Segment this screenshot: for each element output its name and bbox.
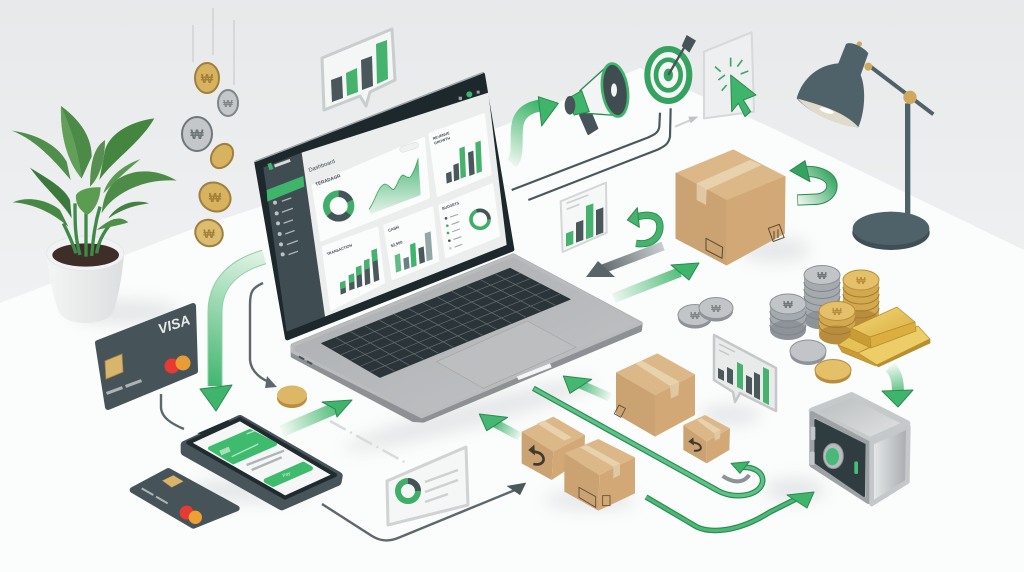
- arrow: green laptop to phone: [200, 257, 264, 411]
- trackpad: [437, 321, 576, 388]
- safe, drawn in 3x coordinates: [810, 395, 908, 504]
- box with return label: [522, 417, 585, 480]
- screen bezel: [257, 75, 512, 338]
- arrow: long green return path: [533, 388, 763, 496]
- pot: [47, 236, 124, 323]
- smartphone: Pay: [282, 470, 292, 478]
- connector: card to phone: [161, 394, 184, 429]
- lamp shade: [797, 43, 868, 127]
- return arrow: green beside chart: [627, 208, 660, 244]
- target icon: [647, 35, 696, 101]
- arrow: grey to left: [586, 246, 663, 277]
- laptop screen, drawn in 3x coordinates: [255, 73, 512, 338]
- keyboard: [322, 268, 570, 377]
- return arrow: near large box: [790, 161, 832, 200]
- visa credit card: [98, 306, 195, 407]
- gold stack short: [819, 302, 855, 344]
- card: cash bars: [385, 208, 438, 279]
- visa credit card: VISA: [156, 312, 192, 337]
- smartphone: [185, 419, 338, 506]
- large cardboard box: [676, 150, 785, 265]
- card: overview with donut and area chart: [313, 138, 429, 240]
- falling won coins: ₩: [201, 71, 214, 86]
- arrow: green to left, above boxes: [563, 376, 610, 397]
- gold bars: [838, 307, 930, 367]
- phone and lower card, drawn in 3x coordinates: [133, 419, 338, 526]
- falling won coins: ₩: [190, 126, 204, 142]
- central cardboard box: [614, 353, 695, 437]
- front box: [564, 439, 635, 511]
- gold stack tall: ₩: [856, 276, 866, 287]
- silver stack tall: ₩: [817, 271, 827, 282]
- lower dark card: [133, 471, 237, 526]
- arrow: faint grey to cursor: [675, 117, 698, 127]
- card: budgets donut: [440, 185, 499, 257]
- stems: [63, 203, 115, 257]
- desk lamp, drawn in 3x coordinates: [797, 41, 933, 250]
- card: transactions bars: [323, 228, 384, 309]
- arrow: green phone to laptop: [282, 400, 352, 431]
- laptop base, drawn in 3x coordinates: [293, 255, 641, 421]
- card: overview with donut and area chart: TERADAGR: [315, 173, 342, 187]
- cursor click card: [704, 32, 756, 118]
- silver stack short: ₩: [783, 300, 793, 311]
- megaphone: [565, 62, 631, 134]
- receipt card with donut: [387, 447, 468, 525]
- card: budgets donut: BUDGETS: [442, 201, 460, 211]
- arrow: grey head to boxes (end): [507, 483, 526, 495]
- connectors: grey lines from target to laptop: [512, 108, 671, 200]
- small chart card middle: [561, 183, 607, 252]
- top icons row, drawn in 3x coordinates: [512, 32, 756, 200]
- arrow: green to box: [614, 263, 699, 298]
- card: revenue bars: GROWTH: [434, 136, 451, 146]
- floating bar chart card, top: [322, 29, 395, 110]
- silver stack short: [770, 294, 806, 340]
- soft floor shadows: [70, 238, 825, 510]
- coin beside phone: [277, 386, 307, 408]
- heading: Dashboard: Dashboard: [308, 159, 336, 174]
- coin stacks and gold bars: [770, 266, 930, 384]
- arrow: gold to safe: [882, 367, 913, 407]
- arrow: green to safe: [646, 492, 814, 530]
- card: revenue bars: REVENUE: [432, 131, 451, 141]
- falling won coins: ₩: [223, 99, 233, 110]
- laptop: [255, 73, 641, 421]
- silver coin pair: ₩: [690, 311, 700, 322]
- arrow: grey phone to boxes: [322, 483, 526, 540]
- card: transactions bars: TRANSACTION: [326, 243, 353, 256]
- card: cash bars: 52,500: [390, 239, 404, 248]
- small return box: [683, 415, 730, 463]
- arrow: grey laptop to coin: [250, 283, 277, 388]
- falling won coins: ₩: [203, 227, 215, 241]
- card: cash bars: CASH: [387, 224, 400, 233]
- dashboard background: [302, 93, 507, 317]
- plant in white pot, drawn in 3x coordinates: [12, 106, 177, 323]
- safe door: [815, 420, 865, 496]
- gold stack tall: [843, 270, 879, 330]
- silver stack tall: [804, 266, 840, 330]
- silver coin pair: [678, 298, 733, 328]
- chart speech bubble: [714, 335, 776, 411]
- connector: faint dotted to receipt card: [330, 421, 408, 464]
- card: revenue bars: [430, 115, 490, 195]
- leaves: [12, 106, 177, 230]
- floor coins: [790, 340, 851, 384]
- sidebar: [263, 153, 325, 332]
- falling won coins: ₩: [209, 190, 222, 205]
- dial: [823, 443, 843, 469]
- arrow: green to left, beside box: [479, 414, 520, 437]
- big box area, drawn in 3x coordinates: [561, 150, 832, 265]
- topbar icons: [459, 91, 480, 100]
- falling won coins: [182, 8, 238, 251]
- arrow: green curve to megaphone: [512, 97, 558, 163]
- silver coin pair: ₩: [711, 304, 721, 315]
- gold stack short: ₩: [832, 307, 842, 318]
- boxes and arrows cluster, drawn in 3x coordinates: [479, 353, 763, 511]
